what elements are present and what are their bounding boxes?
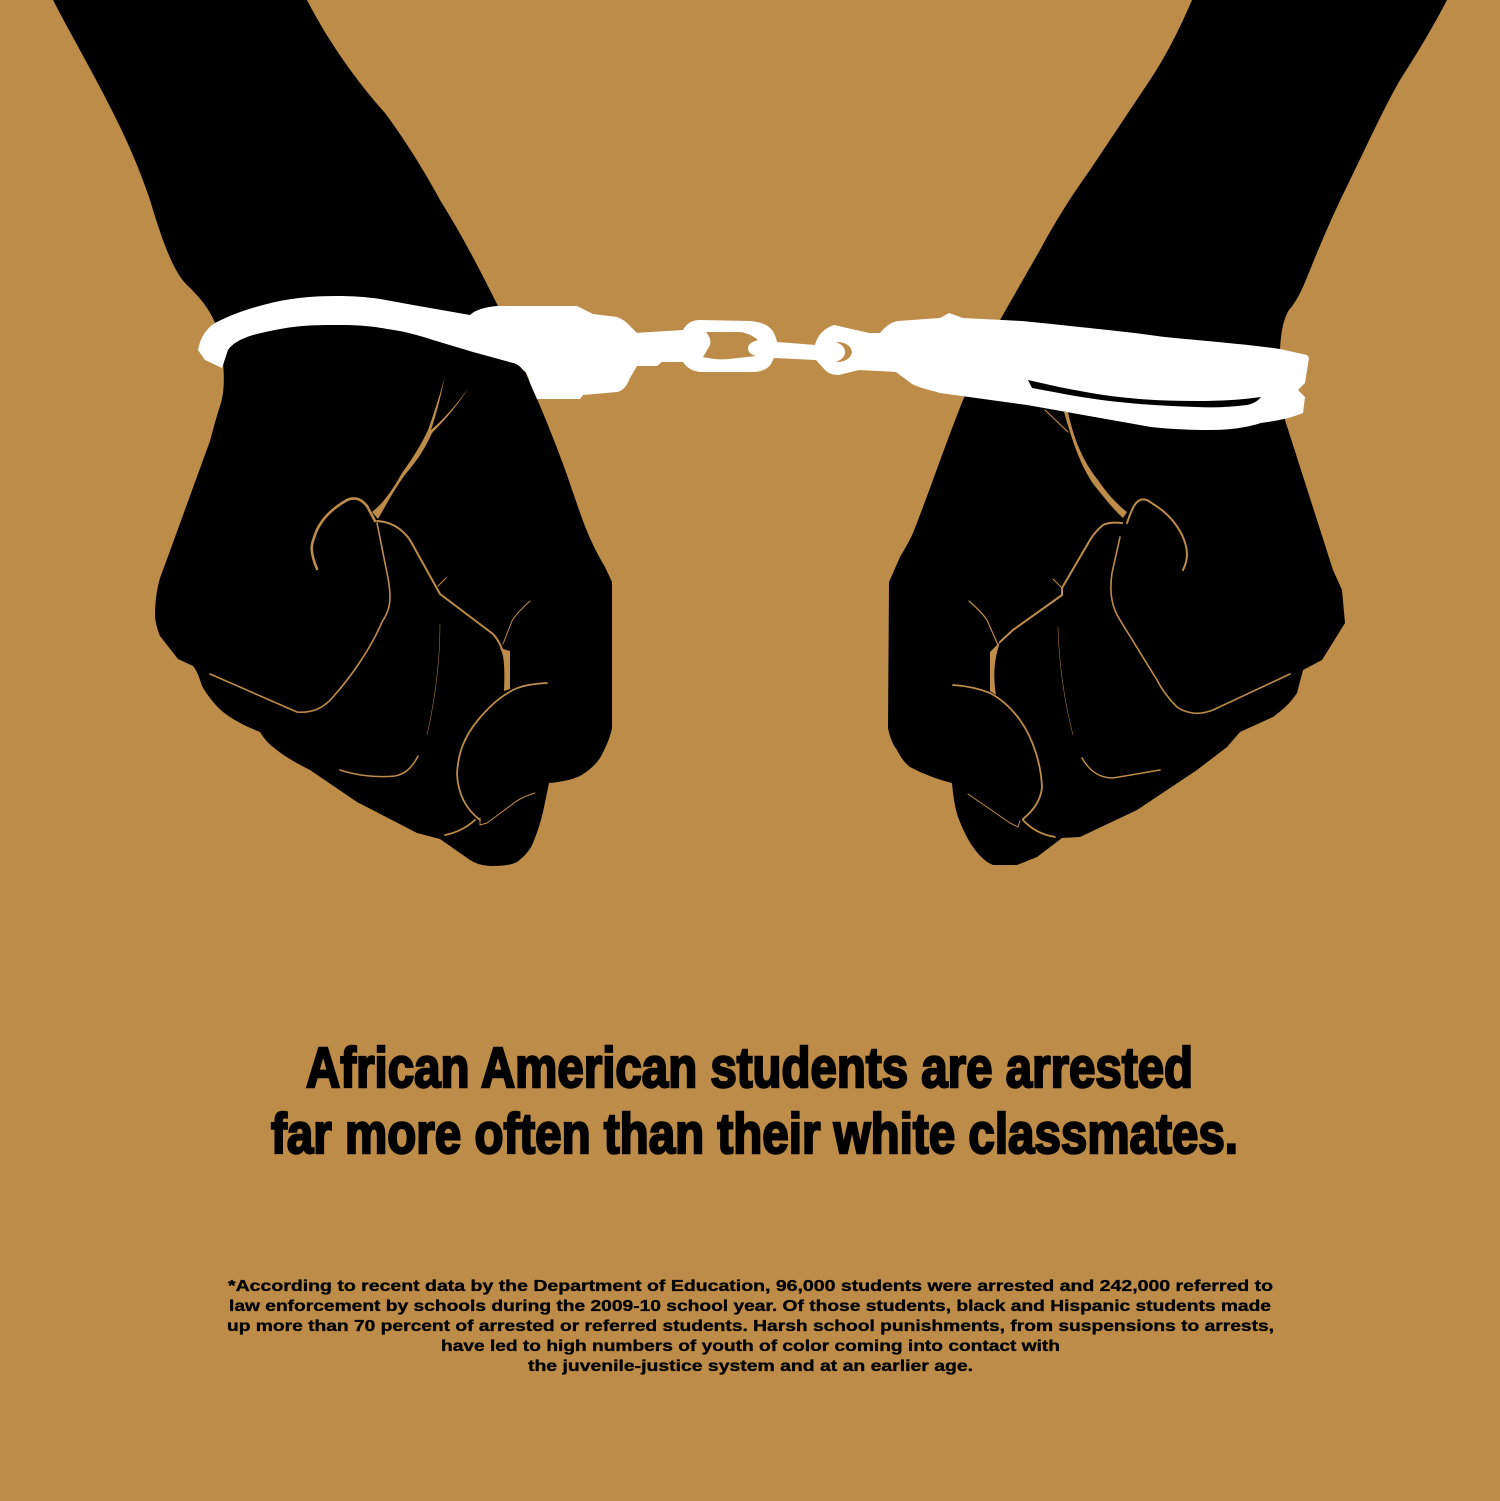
right hand crease lines <box>953 410 1290 837</box>
headline <box>271 1036 1238 1166</box>
chain link <box>634 320 816 372</box>
cuff keyhole ring <box>836 342 852 362</box>
footnote: the juvenile-justice system and at an earlier age. <box>528 1358 973 1375</box>
headline: far more often than their white classmates. <box>271 1102 1238 1166</box>
left cuff <box>198 296 650 399</box>
right cuff with ring <box>815 313 1309 430</box>
cuff slot shadow <box>1028 380 1261 407</box>
footnote: *According to recent data by the Department of Education, 96,000 students were arrested and 242,000 referred to <box>228 1278 1273 1295</box>
footnote: have led to high numbers of youth of color coming into contact with <box>441 1338 1060 1355</box>
headline: African American students are arrested <box>306 1036 1193 1100</box>
handcuffs <box>198 296 1309 430</box>
left hand crease lines <box>210 376 547 835</box>
footnote <box>227 1278 1274 1375</box>
footnote: up more than 70 percent of arrested or referred students. Harsh school punishments, from suspensions to arrests, <box>227 1318 1274 1335</box>
footnote: law enforcement by schools during the 2009-10 school year. Of those students, black and Hispanic students made <box>229 1298 1271 1315</box>
left arm and fist <box>53 0 612 866</box>
right arm and fist <box>888 0 1447 865</box>
